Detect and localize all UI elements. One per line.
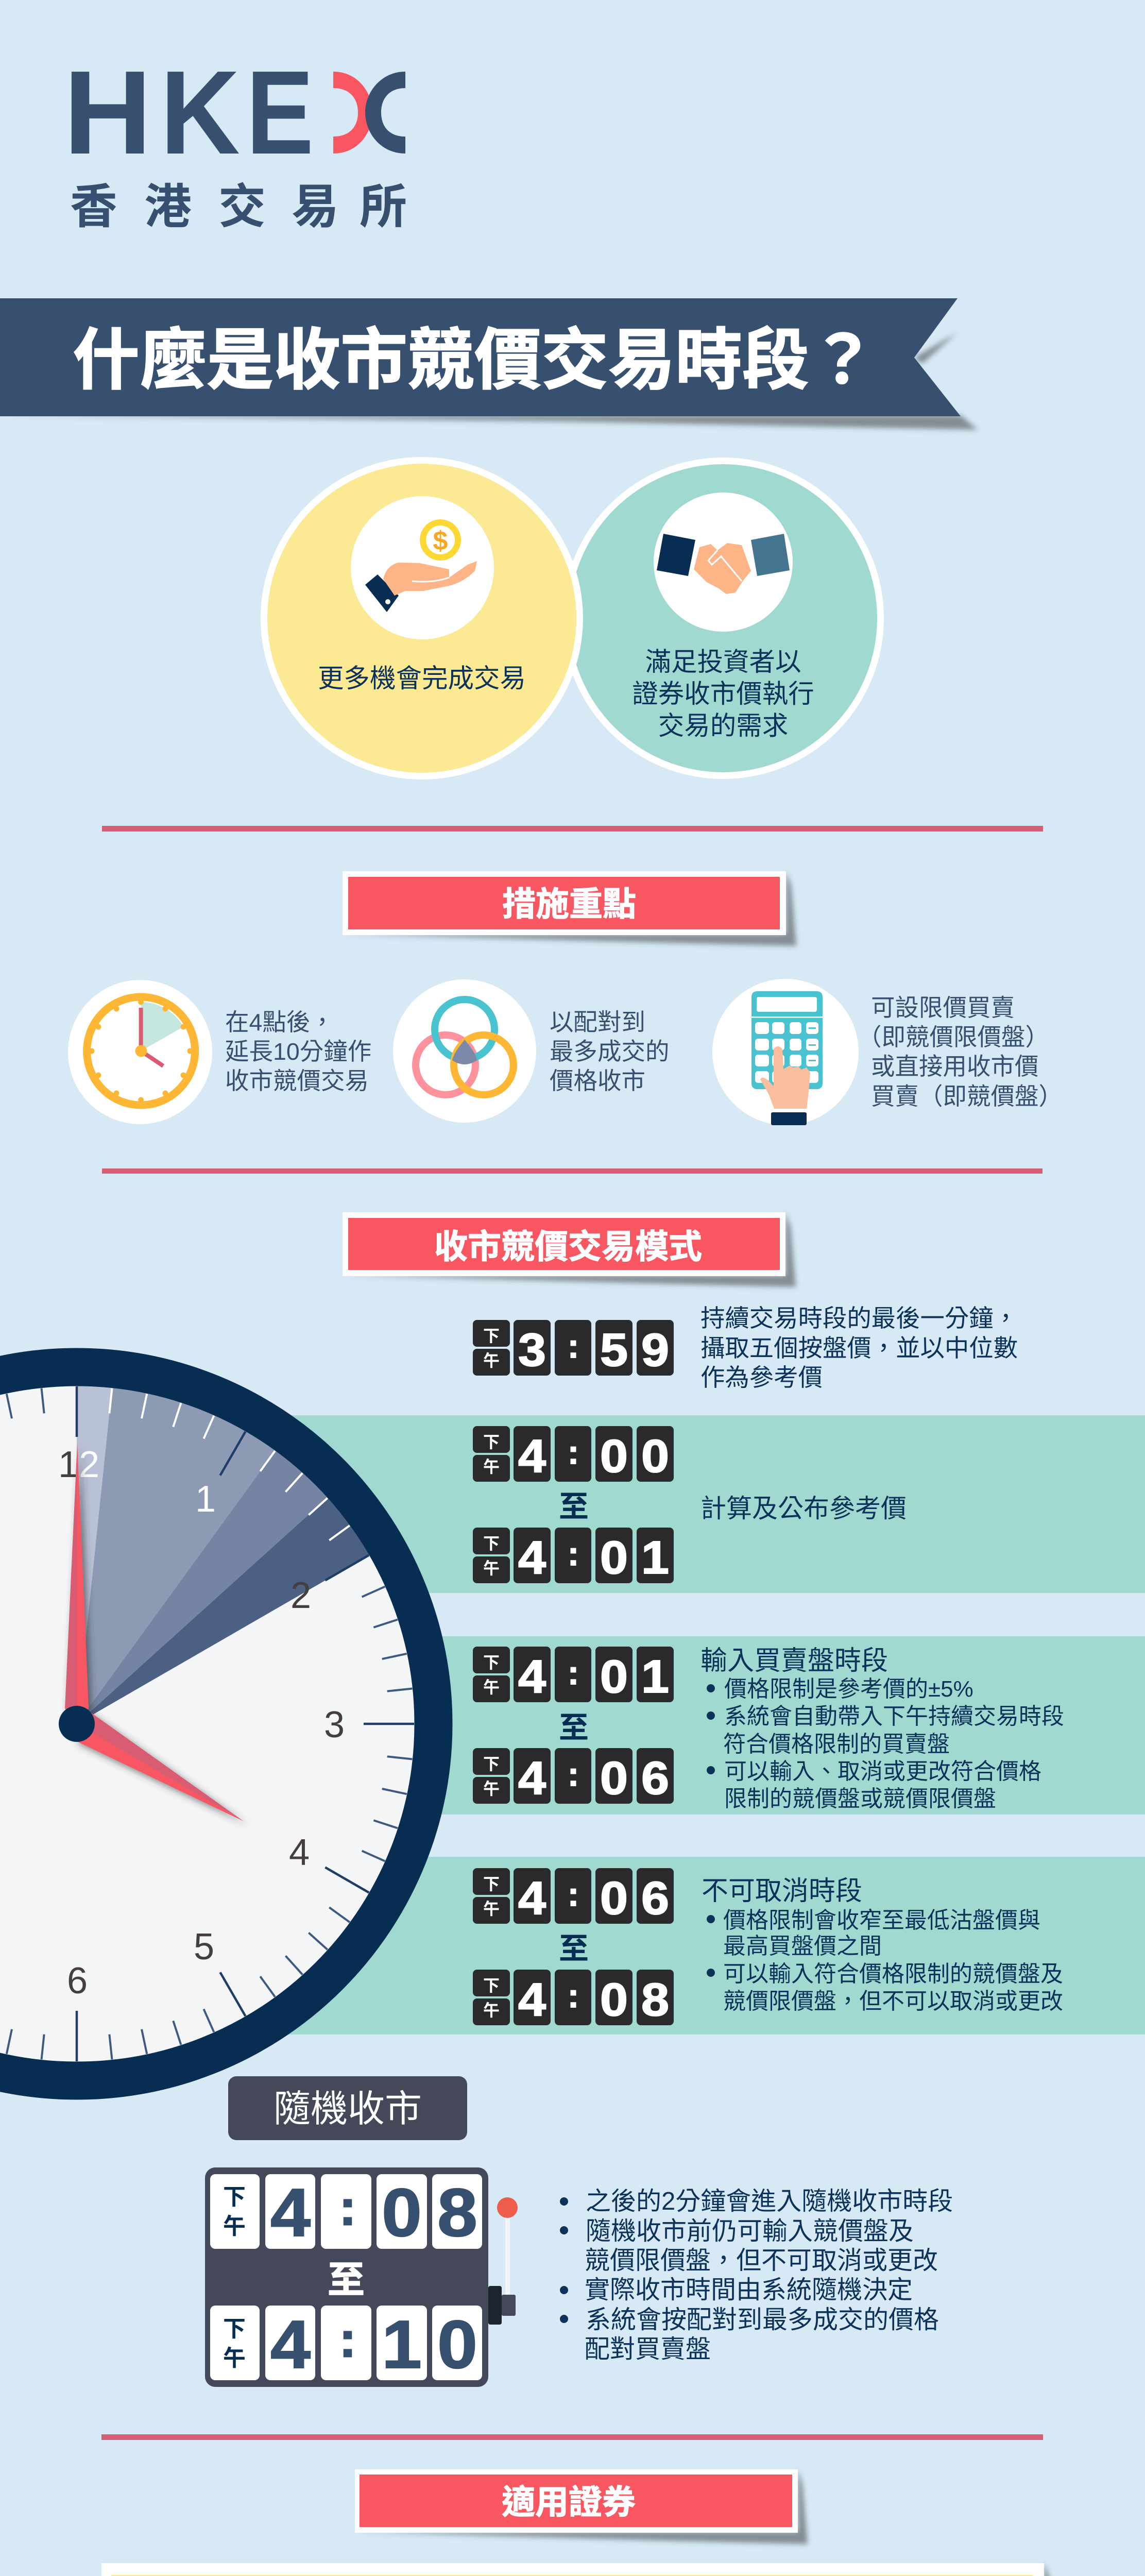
- time row: 4:01: 午: [483, 1559, 500, 1578]
- icon: clock: [87, 997, 195, 1105]
- time row: 4:01 start: :: [568, 1654, 579, 1691]
- measure 1 text: 延長10分鐘作: [225, 1038, 371, 1065]
- time row: 4:06 end: [473, 1748, 674, 1804]
- lower row 4:10: 午: [223, 2346, 246, 2371]
- time row: 4:01: 下: [483, 1534, 500, 1553]
- heading: 措施重點: 措施重點: [502, 885, 636, 923]
- text: no-cancel period: 最高買盤價之間: [723, 1934, 882, 1959]
- text: order input period: 可以輸入、取消或更改符合價格: [724, 1759, 1041, 1784]
- time row: 4:01 start: 0: [600, 1651, 628, 1703]
- to label: 至: [559, 1490, 589, 1523]
- time row: 4:06 start: 0: [600, 1873, 628, 1924]
- time row: 4:06 start: 午: [483, 1900, 500, 1918]
- icon: coin in hand: $: [433, 526, 448, 556]
- lower row 4:10: 下: [223, 2316, 246, 2342]
- text: random closing bullets: 配對買賣盤: [585, 2335, 711, 2363]
- text: no-cancel period: [702, 1876, 1063, 2014]
- to label: 至: [328, 2260, 365, 2301]
- logo Chinese name: 香港交易所: [70, 181, 407, 233]
- time row: 4:08 end: [473, 1970, 674, 2026]
- measure 3 text: 可設限價買賣: [871, 994, 1015, 1021]
- time row: 4:00: 午: [483, 1458, 500, 1476]
- time row: 4:01: [473, 1528, 674, 1584]
- clock numbers: [58, 1444, 345, 2002]
- panel: 4:08 to 4:10 slot machine: [205, 2167, 518, 2387]
- text: order input period: 價格限制是參考價的±5%: [724, 1676, 973, 1702]
- text: 3:59 description: 持續交易時段的最後一分鐘，: [700, 1305, 1018, 1332]
- upper row 4:08: 午: [223, 2214, 246, 2239]
- time row: 4:06 start: 下: [483, 1875, 500, 1893]
- time row: 3:59: 午: [483, 1351, 500, 1370]
- yellow circle: [261, 457, 583, 779]
- heading: 收市競價交易模式: [343, 1212, 796, 1287]
- time row: 4:06 end: 6: [641, 1753, 669, 1804]
- lower row 4:10: :: [339, 2312, 356, 2367]
- time row: 4:01: 1: [641, 1532, 669, 1584]
- measure 3 text: （即競價限價盤）: [858, 1024, 1049, 1050]
- clock numbers: 6: [67, 1960, 88, 2002]
- time row: 3:59: 下: [483, 1327, 500, 1345]
- icon: coin in hand: [365, 519, 477, 612]
- heading: 適用證券: [355, 2469, 808, 2544]
- band: 4:01 to 4:06: [0, 1636, 1145, 1815]
- text: order input period: 輸入買賣盤時段: [700, 1646, 888, 1676]
- measure 2: [393, 979, 670, 1123]
- text: 3:59 description: 攝取五個按盤價，並以中位數: [700, 1335, 1018, 1362]
- measure 1 text: [225, 1009, 371, 1094]
- measure 1 text: 收市競價交易: [225, 1067, 369, 1094]
- text: random closing bullets: 系統會按配對到最多成交的價格: [586, 2306, 939, 2334]
- panel: benefit circles: [261, 457, 884, 779]
- time row: 4:01 start: [473, 1647, 674, 1703]
- measure 1 text: 在4點後，: [225, 1009, 334, 1036]
- clock wedges: [77, 1384, 371, 1724]
- clock numbers: 2: [290, 1575, 311, 1616]
- icon: overlapping rings: [416, 999, 514, 1095]
- time row: 4:01: :: [568, 1535, 579, 1572]
- time row: 4:06 end: :: [568, 1756, 579, 1793]
- time row: 4:01 start: 下: [483, 1653, 500, 1672]
- time row: 4:08 end: 8: [641, 1974, 669, 2026]
- teal circle text: 滿足投資者以: [645, 647, 801, 676]
- time row: 4:00: 0: [600, 1431, 628, 1482]
- teal circle text: [632, 647, 814, 740]
- text: 3:59 description: [700, 1305, 1018, 1392]
- text: 3:59 description: 作為參考價: [700, 1364, 823, 1392]
- machine lever: [488, 2197, 518, 2325]
- measure 1: [68, 980, 371, 1124]
- time row: 4:06 end: 午: [483, 1780, 500, 1798]
- time row: 4:00: 4: [518, 1431, 546, 1482]
- time row: 3:59: 9: [641, 1325, 669, 1376]
- icon: calculator and hand: [751, 991, 823, 1125]
- banner shadow: [0, 333, 978, 430]
- measure 3: [712, 979, 1063, 1125]
- band: 4:00 to 4:01: [0, 1415, 1145, 1593]
- to label: 至: [559, 1932, 589, 1965]
- upper row 4:08: 下: [223, 2184, 246, 2210]
- time row: 3:59: 3: [518, 1325, 546, 1376]
- clock numbers: 5: [194, 1926, 214, 1968]
- time row: 3:59: :: [568, 1328, 579, 1365]
- time row: 4:01 start: 4: [518, 1651, 546, 1703]
- measure 2 text: 最多成交的: [550, 1038, 670, 1065]
- time row: 4:06 end: 4: [518, 1753, 546, 1804]
- time row: 4:08 end: :: [568, 1977, 579, 2014]
- measure 3 text: [858, 994, 1063, 1110]
- time row: 4:06 start: 6: [641, 1873, 669, 1924]
- clock ticks: [7, 1386, 414, 2061]
- to label: 至: [559, 1711, 589, 1744]
- time row: 4:06 start: [473, 1868, 674, 1924]
- text: random closing bullets: 之後的2分鐘會進入隨機收市時段: [586, 2188, 953, 2215]
- text: random closing bullets: 實際收市時間由系統隨機決定: [585, 2276, 913, 2304]
- time row: 4:08 end: 午: [483, 2001, 500, 2020]
- logo X arcs: [333, 72, 405, 154]
- upper row 4:08: 0: [382, 2175, 422, 2250]
- clock numbers: 4: [289, 1832, 310, 1873]
- heading: 適用證券: 適用證券: [502, 2483, 636, 2521]
- clock numbers: 1: [195, 1479, 216, 1520]
- upper row 4:08: :: [339, 2180, 356, 2235]
- heading: 收市競價交易模式: 收市競價交易模式: [434, 1228, 702, 1265]
- clock numbers: 3: [324, 1704, 345, 1745]
- panel: key measures: [68, 979, 1063, 1125]
- clock: [0, 1367, 434, 2080]
- measure 2 text: 價格收市: [550, 1067, 645, 1094]
- teal circle: [562, 457, 884, 779]
- upper row 4:08: 4: [270, 2175, 311, 2250]
- lower row 4:10: 0: [437, 2307, 477, 2382]
- logo letters: E: [246, 46, 314, 179]
- text: order input period: 符合價格限制的買賣盤: [723, 1732, 950, 1757]
- time row: 4:08 end: 下: [483, 1976, 500, 1995]
- logo letters: H: [63, 46, 152, 179]
- icon: handshake: [657, 534, 790, 594]
- clock face: [0, 1384, 417, 2064]
- time row: 4:06 start: 4: [518, 1873, 546, 1924]
- text: order input period: [700, 1646, 1064, 1811]
- band: 4:06 to 4:08: [0, 1857, 1145, 2035]
- time row: 4:01 start: 午: [483, 1678, 500, 1697]
- heading: 措施重點: [343, 871, 796, 946]
- title banner: [0, 298, 978, 430]
- time row: 4:06 end: 0: [600, 1753, 628, 1804]
- clock hub: [59, 1706, 95, 1742]
- heading: random closing: [228, 2076, 467, 2140]
- logo: HKEX: [63, 46, 407, 233]
- upper row 4:08: 8: [437, 2175, 477, 2250]
- text: no-cancel period: 價格限制會收窄至最低沽盤價與: [723, 1908, 1040, 1933]
- measure 3 text: 或直接用收市價: [871, 1053, 1038, 1080]
- time row: 4:00: [473, 1426, 674, 1482]
- text: no-cancel period: 競價限價盤，但不可以取消或更改: [723, 1989, 1063, 2014]
- time row: 4:01 start: 1: [641, 1651, 669, 1703]
- heading: random closing: 隨機收市: [274, 2089, 422, 2130]
- text: random closing bullets: [560, 2188, 953, 2363]
- lower row 4:10: 1: [382, 2307, 422, 2382]
- text: no-cancel period: 可以輸入符合價格限制的競價盤及: [723, 1961, 1063, 1987]
- yellow circle text: 更多機會完成交易: [318, 664, 526, 693]
- measure 3 text: 買賣（即競價盤）: [871, 1083, 1063, 1110]
- teal circle text: 交易的需求: [658, 711, 788, 740]
- time row: 4:06 end: 下: [483, 1755, 500, 1773]
- text: calculate and publish: 計算及公布參考價: [700, 1494, 907, 1523]
- logo letters: [63, 46, 314, 179]
- text: no-cancel period: 不可取消時段: [702, 1876, 862, 1906]
- text: order input period: 限制的競價盤或競價限價盤: [724, 1786, 996, 1811]
- lower row 4:10: [210, 2306, 482, 2382]
- time row: 4:08 end: 4: [518, 1974, 546, 2026]
- time row: 4:00: 下: [483, 1433, 500, 1451]
- time row: 4:08 end: 0: [600, 1974, 628, 2026]
- clock hands: [65, 1443, 244, 1821]
- text: order input period: 系統會自動帶入下午持續交易時段: [724, 1704, 1064, 1729]
- clock ring: [0, 1367, 434, 2080]
- measure 2 text: 以配對到: [550, 1009, 645, 1036]
- clock numbers: 12: [58, 1444, 99, 1485]
- time row: 3:59: 5: [600, 1325, 628, 1376]
- time row: 4:06 start: :: [568, 1876, 579, 1913]
- time row: 4:01: 4: [518, 1532, 546, 1584]
- text: random closing bullets: 競價限價盤，但不可取消或更改: [585, 2247, 938, 2275]
- text: random closing bullets: 隨機收市前仍可輸入競價盤及: [586, 2217, 914, 2245]
- title text: 什麼是收市競價交易時段？: [73, 323, 876, 398]
- upper row 4:08: [210, 2174, 482, 2250]
- time row: 4:00: 0: [641, 1431, 669, 1482]
- time row: 4:00: :: [568, 1434, 579, 1471]
- logo letters: K: [160, 46, 240, 179]
- time row: 3:59: [473, 1320, 674, 1376]
- measure 2 text: [550, 1009, 670, 1094]
- panel: applicable securities: [101, 2563, 1061, 2576]
- lower row 4:10: 4: [270, 2307, 311, 2382]
- teal circle text: 證券收市價執行: [632, 679, 814, 708]
- time row: 4:01: 0: [600, 1532, 628, 1584]
